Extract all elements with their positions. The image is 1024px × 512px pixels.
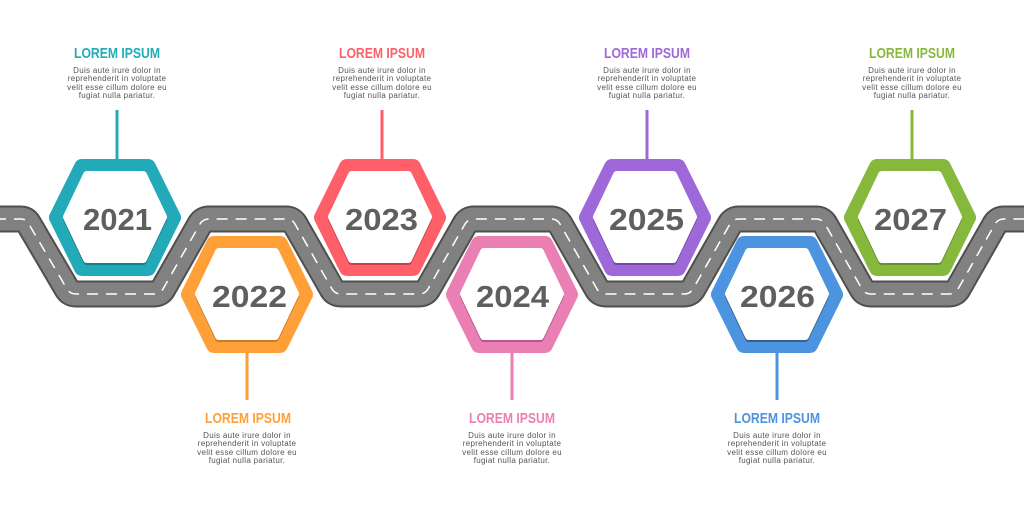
text 2021: velit esse cillum dolore eu xyxy=(67,83,167,92)
year 2024: 2024 xyxy=(476,279,550,314)
text 2022: Duis aute irure dolor in xyxy=(203,431,291,440)
text 2026: fugiat nulla pariatur. xyxy=(739,456,815,465)
text 2027: reprehenderit in voluptate xyxy=(863,74,962,83)
text 2027: fugiat nulla pariatur. xyxy=(874,91,950,100)
road xyxy=(0,219,1024,294)
heading 2027: LOREM IPSUM xyxy=(869,45,955,62)
text 2024: reprehenderit in voluptate xyxy=(463,439,562,448)
text 2024: fugiat nulla pariatur. xyxy=(474,456,550,465)
hexagon 2021 xyxy=(57,167,173,268)
text 2025: Duis aute irure dolor in xyxy=(603,66,691,75)
text 2022: velit esse cillum dolore eu xyxy=(197,448,297,457)
heading 2025: LOREM IPSUM xyxy=(604,45,690,62)
milestone 2022 xyxy=(189,244,305,465)
text 2023: reprehenderit in voluptate xyxy=(333,74,432,83)
hexagon 2026 xyxy=(719,244,835,345)
connector 2024 xyxy=(510,352,514,400)
text 2025: fugiat nulla pariatur. xyxy=(609,91,685,100)
text 2023: Duis aute irure dolor in xyxy=(338,66,426,75)
heading 2024: LOREM IPSUM xyxy=(469,410,555,427)
text 2027: Duis aute irure dolor in xyxy=(868,66,956,75)
hexagon 2027 xyxy=(852,167,968,268)
text 2021: Duis aute irure dolor in xyxy=(73,66,161,75)
text 2023: fugiat nulla pariatur. xyxy=(344,91,420,100)
heading 2023: LOREM IPSUM xyxy=(339,45,425,62)
connector 2026 xyxy=(776,352,778,400)
milestone 2025 xyxy=(587,45,703,268)
year 2027: 2027 xyxy=(874,202,947,237)
milestone 2021 xyxy=(57,45,173,268)
heading 2021: LOREM IPSUM xyxy=(74,45,160,62)
text 2023: velit esse cillum dolore eu xyxy=(332,83,432,92)
text 2025: velit esse cillum dolore eu xyxy=(597,83,697,92)
milestone 2026 xyxy=(719,244,835,465)
hexagon 2025 xyxy=(587,167,703,268)
hexagon 2023 xyxy=(322,167,438,268)
text 2021: fugiat nulla pariatur. xyxy=(79,91,155,100)
milestone 2027 xyxy=(852,45,968,268)
text 2026: Duis aute irure dolor in xyxy=(733,431,821,440)
year 2021: 2021 xyxy=(83,202,152,237)
text 2026: reprehenderit in voluptate xyxy=(728,439,827,448)
text 2026: velit esse cillum dolore eu xyxy=(727,448,827,457)
year 2025: 2025 xyxy=(609,202,684,237)
connector 2025 xyxy=(646,110,648,160)
milestone 2024 xyxy=(454,244,570,465)
text 2025: reprehenderit in voluptate xyxy=(598,74,697,83)
milestone 2023 xyxy=(322,45,438,268)
heading 2026: LOREM IPSUM xyxy=(734,410,820,427)
heading 2022: LOREM IPSUM xyxy=(205,410,291,427)
hexagon 2024 xyxy=(454,244,570,345)
year 2026: 2026 xyxy=(740,279,815,314)
year 2022: 2022 xyxy=(212,279,287,314)
text 2022: fugiat nulla pariatur. xyxy=(209,456,285,465)
text 2022: reprehenderit in voluptate xyxy=(198,439,297,448)
connector 2023 xyxy=(380,110,384,160)
connector 2021 xyxy=(116,110,118,160)
text 2021: reprehenderit in voluptate xyxy=(68,74,167,83)
year 2023: 2023 xyxy=(345,202,418,237)
text 2024: Duis aute irure dolor in xyxy=(468,431,556,440)
connector 2022 xyxy=(246,352,248,400)
hexagon 2022 xyxy=(189,244,305,345)
text 2024: velit esse cillum dolore eu xyxy=(462,448,562,457)
text 2027: velit esse cillum dolore eu xyxy=(862,83,962,92)
connector 2027 xyxy=(910,110,914,160)
